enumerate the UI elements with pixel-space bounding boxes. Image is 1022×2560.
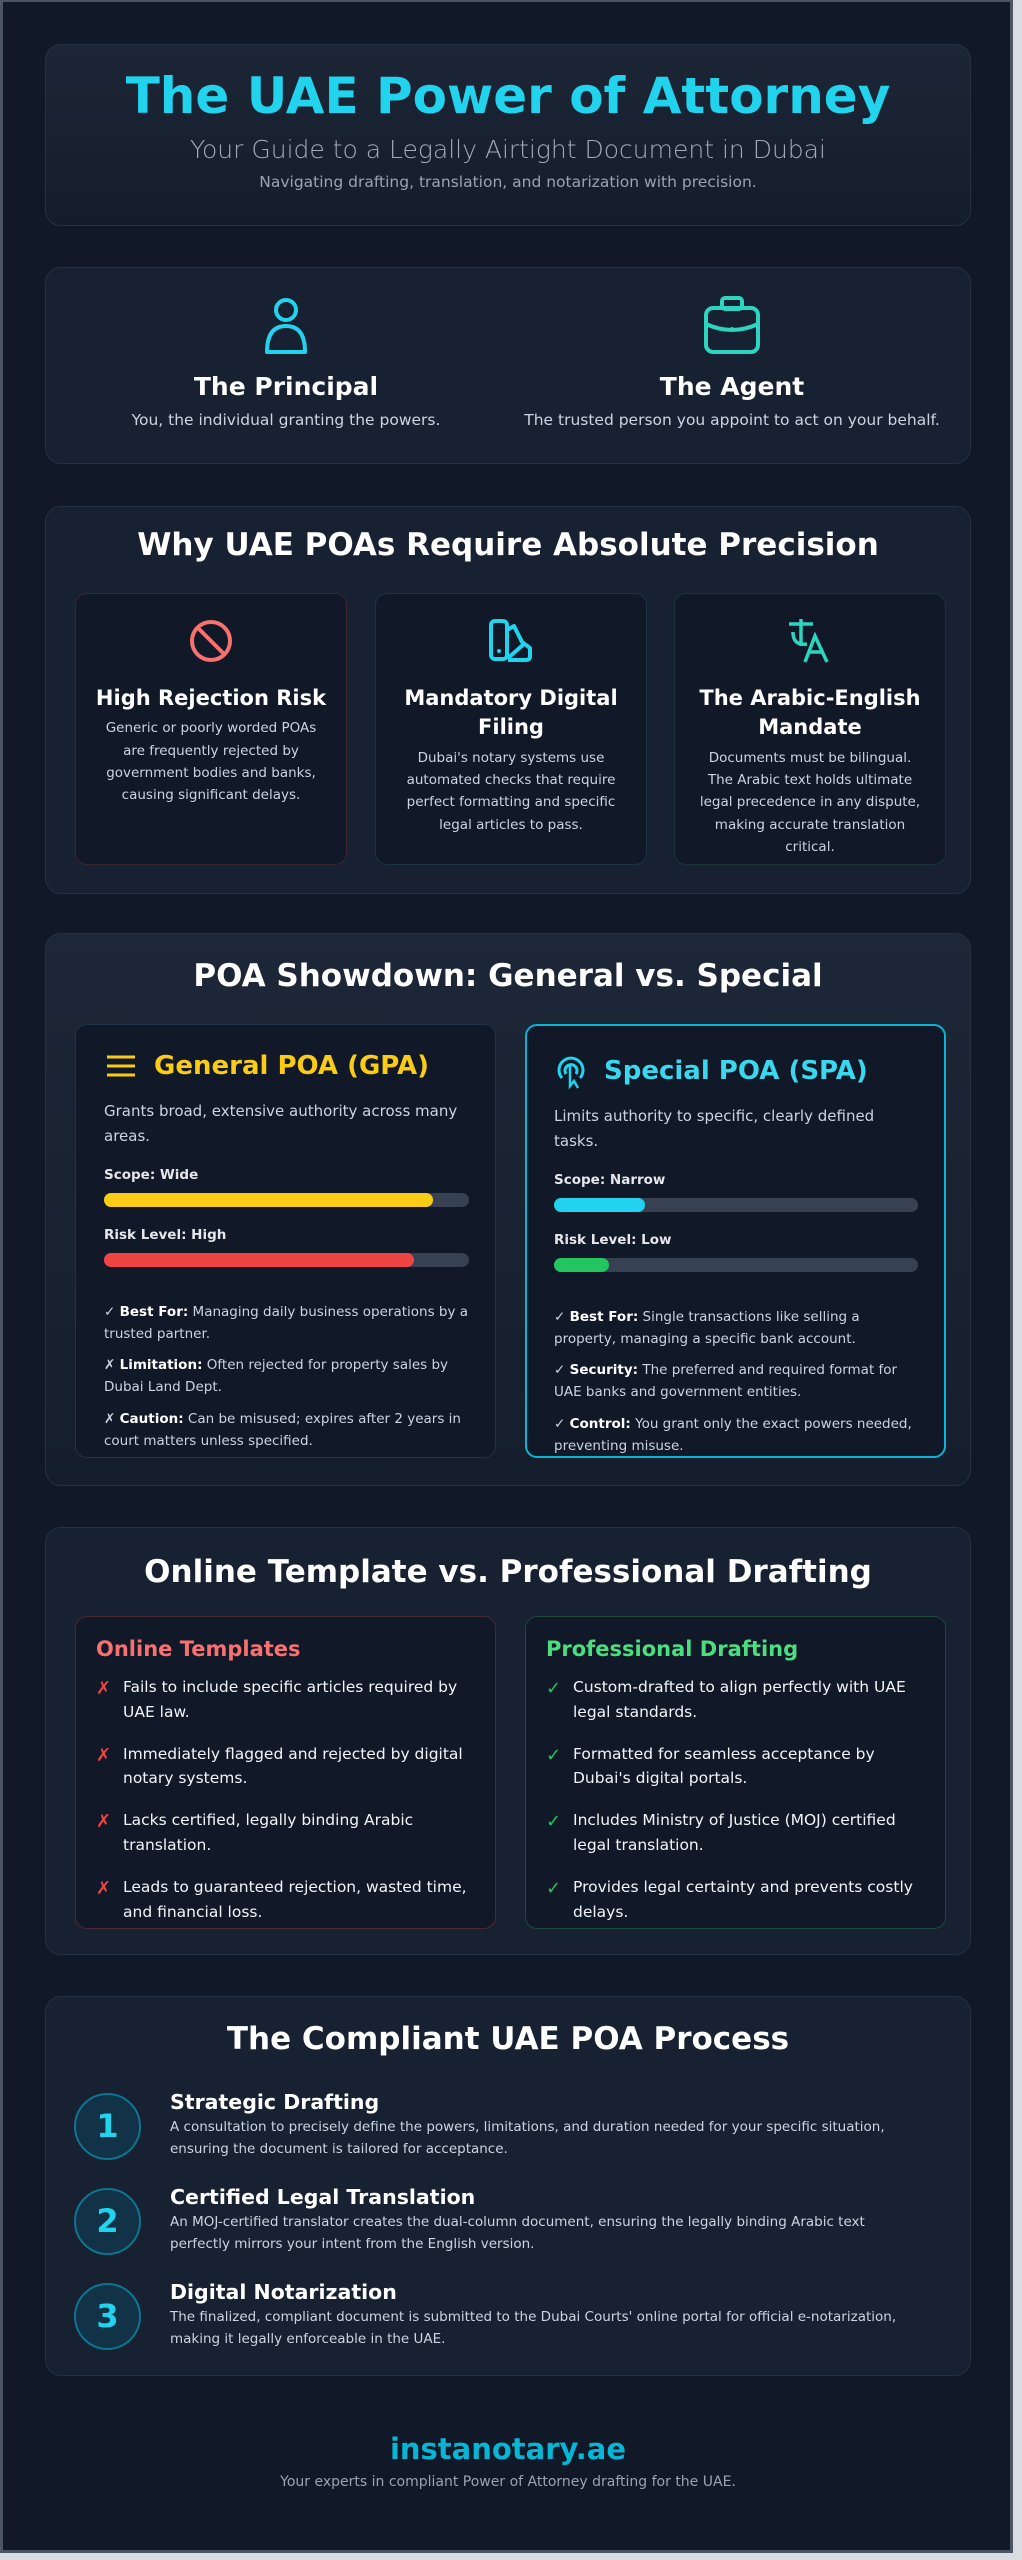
- card: professional drafting: ✓: [546, 1878, 561, 1899]
- icon: briefcase: [704, 296, 760, 354]
- heading: POA Showdown: General vs. Special: [193, 958, 823, 994]
- icon: person: [265, 298, 307, 354]
- card: online templates: ✗: [96, 1678, 111, 1699]
- card: professional drafting: ✓: [546, 1745, 561, 1766]
- card: arabic english: Mandate: [758, 715, 862, 739]
- card: GPA: [75, 1024, 496, 1458]
- panel: showdown: [45, 933, 971, 1486]
- card: SPA: Risk Level: Low: [554, 1232, 672, 1248]
- card: digital filing: Filing: [478, 715, 544, 739]
- card: online templates: Immediately flagged and rejected by digital notary systems.: [123, 1745, 463, 1787]
- card: professional drafting: Custom-drafted to align perfectly with UAE legal standards.: [573, 1678, 906, 1721]
- card: GPA: ✓ Best For: Managing daily business operations by a trusted partner.: [104, 1304, 468, 1342]
- card: arabic english: Documents must be bilingual. The Arabic text holds ultimate legal precedence in any dispute, making accurate translation critical.: [700, 750, 920, 855]
- card: digital filing: [375, 593, 647, 865]
- card: professional drafting: [525, 1616, 946, 1929]
- card: SPA: [525, 1024, 946, 1458]
- subtitle: Your Guide to a Legally Airtight Document in Dubai: [190, 135, 826, 164]
- SPA heading: Special POA (SPA): [604, 1056, 868, 1086]
- card: online templates: ✗: [96, 1878, 111, 1899]
- agent: [524, 296, 940, 429]
- scope bar: [104, 1166, 469, 1207]
- card: online templates: Online Templates: [96, 1637, 301, 1661]
- title: The UAE Power of Attorney: [126, 67, 890, 125]
- card: GPA: ✗ Limitation: Often rejected for property sales by Dubai Land Dept.: [104, 1357, 448, 1395]
- card: rejection: [75, 593, 347, 865]
- card: rejection: Generic or poorly worded POAs are frequently rejected by government bodies and banks, causing significant delays.: [106, 720, 316, 803]
- step 3: [74, 2280, 896, 2350]
- risk bar: Risk Level: High: [104, 1226, 226, 1242]
- header panel: [45, 44, 971, 226]
- card: professional drafting: ✓: [546, 1678, 561, 1699]
- card: GPA: Grants broad, extensive authority across many areas.: [104, 1102, 457, 1145]
- scope bar: Scope: Wide: [104, 1166, 198, 1182]
- card: SPA: ✓ Security: The preferred and required format for UAE banks and government entities.: [554, 1362, 897, 1400]
- heading: The Compliant UAE POA Process: [227, 2021, 789, 2057]
- principal: [132, 298, 440, 429]
- card: SPA: ✓ Best For: Single transactions like selling a property, managing a specific bank account.: [554, 1308, 860, 1347]
- card: SPA: Scope: Narrow: [554, 1172, 665, 1188]
- card: SPA: ✓ Control: You grant only the exact powers needed, preventing misuse.: [554, 1416, 912, 1454]
- card: GPA: ✗ Caution: Can be misused; expires after 2 years in court matters unless specified.: [104, 1411, 461, 1449]
- card: SPA: Limits authority to specific, clearly defined tasks.: [554, 1107, 874, 1150]
- card: online templates: Lacks certified, legally binding Arabic translation.: [123, 1811, 413, 1854]
- card: professional drafting: Professional Drafting: [546, 1637, 798, 1661]
- panel: process: [45, 1996, 971, 2376]
- step 1: 1: [96, 2107, 119, 2145]
- step 1: A consultation to precisely define the powers, limitations, and duration needed for your specific situation, ensuring the document is tailored for acceptance.: [170, 2119, 885, 2157]
- card: arabic english: The Arabic-English: [699, 686, 921, 710]
- principal: The Principal: [194, 372, 378, 401]
- card: online templates: [75, 1616, 496, 1929]
- card: online templates: ✗: [96, 1811, 111, 1832]
- step 3: The finalized, compliant document is submitted to the Dubai Courts' online portal for official e-notarization, making it legally enforceable in the UAE.: [170, 2309, 896, 2347]
- icon: translate: [789, 619, 828, 663]
- step 2: Certified Legal Translation: [170, 2185, 475, 2209]
- heading: Why UAE POAs Require Absolute Precision: [137, 527, 879, 563]
- step 1: Strategic Drafting: [170, 2090, 379, 2114]
- card: arabic english: [674, 593, 946, 865]
- panel: why precision: [45, 506, 971, 894]
- card: online templates: Fails to include specific articles required by UAE law.: [123, 1678, 457, 1721]
- footer: instanotary.ae: [390, 2432, 626, 2466]
- principal: You, the individual granting the powers.: [132, 411, 440, 429]
- step 1: [74, 2090, 885, 2160]
- card: digital filing: Dubai's notary systems use automated checks that require perfect formatting and specific legal articles to pass.: [407, 750, 615, 833]
- panel: parties: [45, 267, 971, 464]
- card: online templates: Leads to guaranteed rejection, wasted time, and financial loss.: [123, 1878, 467, 1921]
- footer: Your experts in compliant Power of Attorney drafting for the UAE.: [280, 2474, 736, 2490]
- card: professional drafting: Formatted for seamless acceptance by Dubai's digital portals.: [573, 1745, 875, 1787]
- risk bar: [104, 1226, 469, 1267]
- agent: The trusted person you appoint to act on your behalf.: [524, 411, 940, 429]
- card: professional drafting: Includes Ministry of Justice (MOJ) certified legal translation.: [573, 1811, 896, 1854]
- GPA heading: General POA (GPA): [154, 1051, 429, 1081]
- card: professional drafting: Provides legal certainty and prevents costly delays.: [573, 1878, 913, 1921]
- step 2: [74, 2185, 865, 2255]
- icon: ban: [190, 620, 232, 662]
- agent: The Agent: [660, 372, 804, 401]
- card: professional drafting: ✓: [546, 1811, 561, 1832]
- panel: template vs professional: [45, 1527, 971, 1955]
- step 2: 2: [96, 2202, 119, 2240]
- step 3: 3: [96, 2297, 119, 2335]
- step 2: An MOJ-certified translator creates the dual-column document, ensuring the legally binding Arabic text perfectly mirrors your intent from the English version.: [170, 2214, 865, 2252]
- card: rejection: High Rejection Risk: [96, 686, 326, 710]
- card: online templates: ✗: [96, 1745, 111, 1766]
- card: digital filing: Mandatory Digital: [404, 686, 618, 710]
- footer: [280, 2432, 736, 2490]
- tagline: Navigating drafting, translation, and notarization with precision.: [259, 173, 757, 191]
- icon: devices: [489, 619, 532, 662]
- step 3: Digital Notarization: [170, 2280, 397, 2304]
- heading: Online Template vs. Professional Drafting: [144, 1554, 872, 1590]
